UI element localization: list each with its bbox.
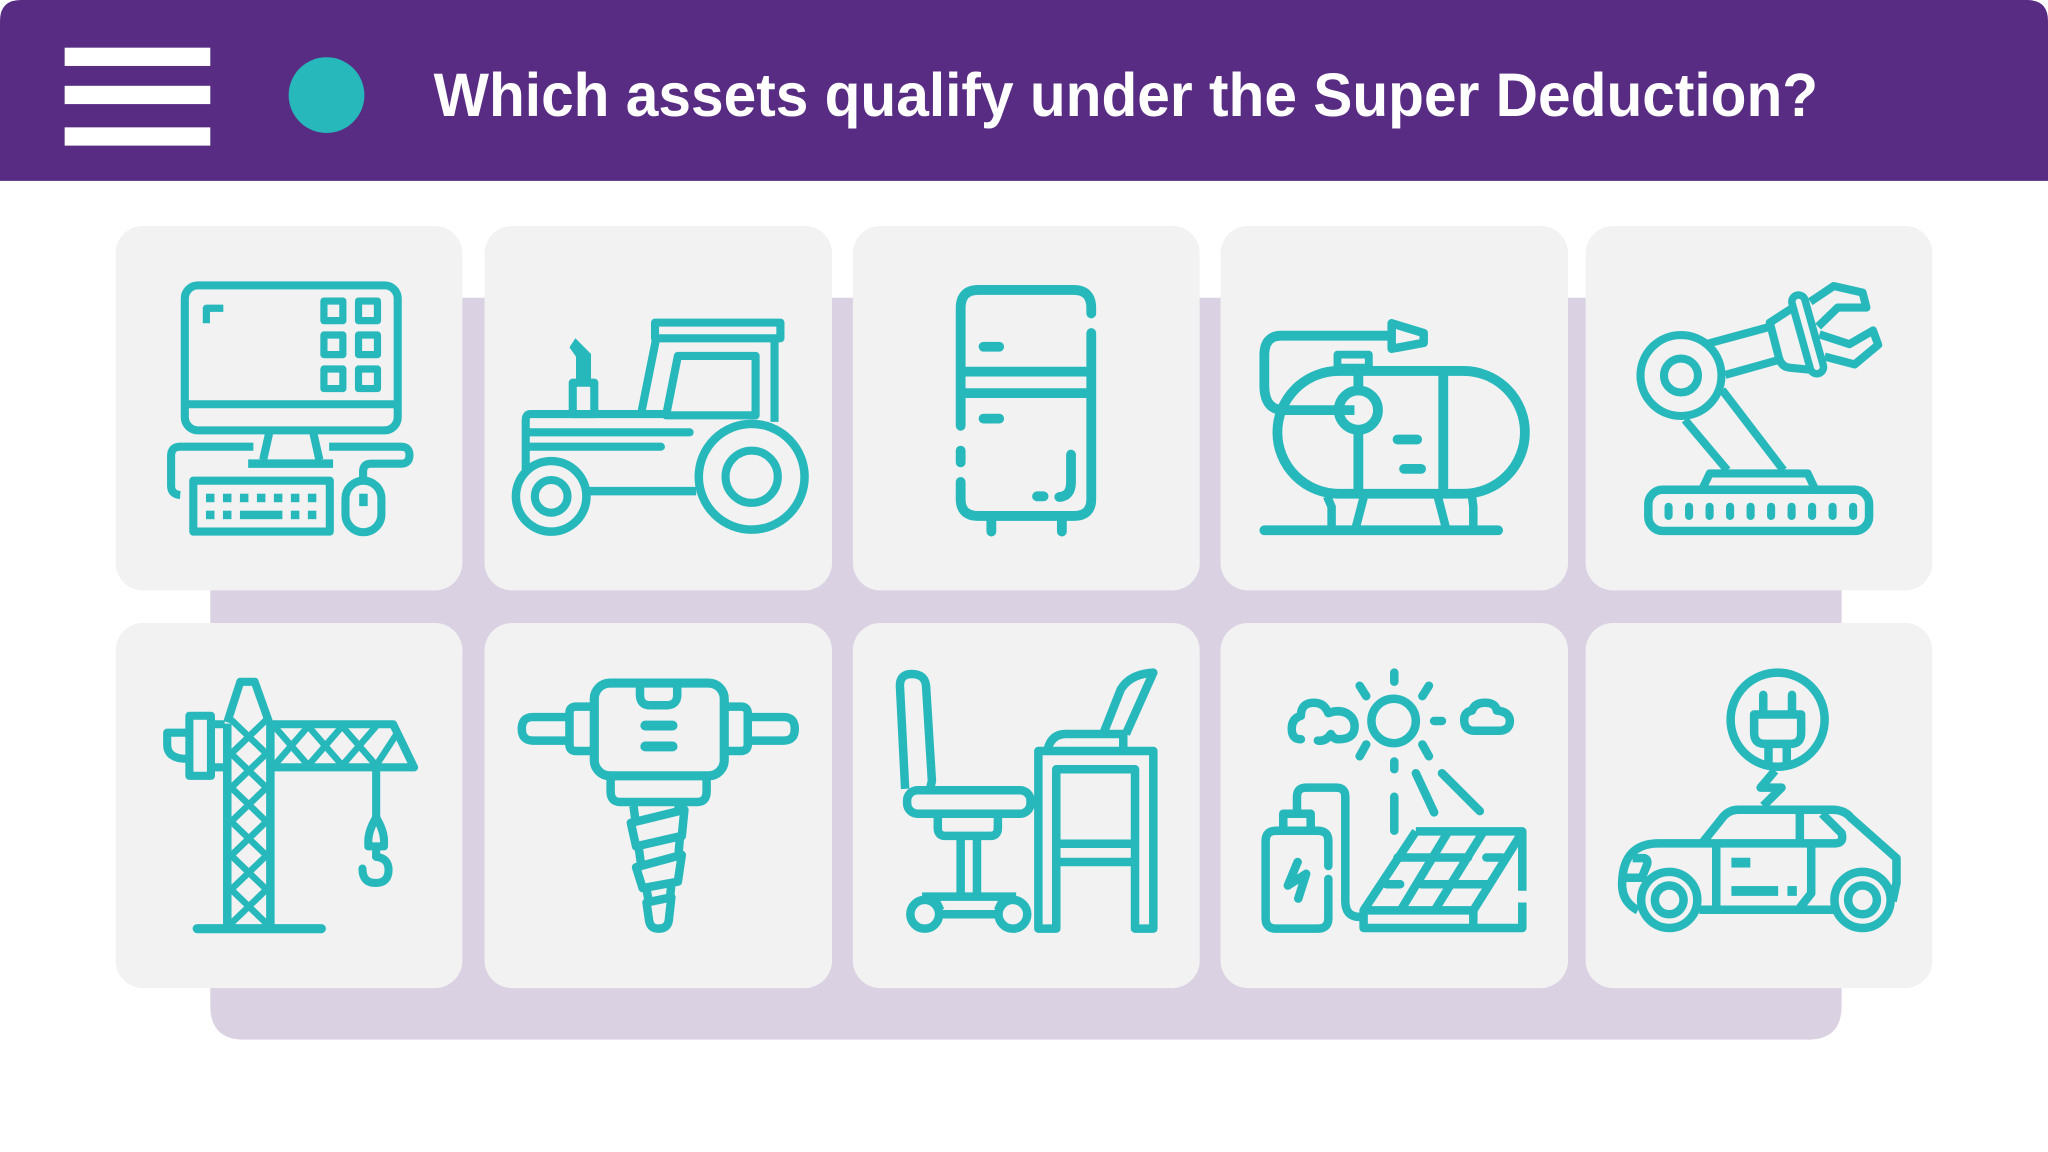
icon: fridge [961,290,1091,532]
icon: tractor [516,323,805,532]
icon: robot arm [1640,286,1878,531]
panel: lilac backing [210,298,1842,1040]
panel: computer [116,226,462,590]
icon: menu bars [65,48,210,146]
icon: air compressor [1264,323,1525,530]
panel: fridge [853,226,1200,590]
icon: teal dot [289,57,364,133]
panel: office furniture [853,623,1200,988]
panel: air compressor [1221,226,1568,590]
icon: chair and desk [900,673,1153,929]
panel: robot arm [1586,226,1932,590]
header banner [0,0,2048,181]
title: Which assets qualify under the Super Deduction? [434,61,1818,130]
panel: solar power [1221,623,1568,988]
icon: tower crane [167,682,414,929]
icon: jackhammer [522,683,795,929]
icon: electric car [1622,673,1896,928]
panel: tower crane [116,623,462,988]
panel: jackhammer [485,623,832,988]
icon: solar panel and battery [1266,673,1522,929]
panel: electric car [1586,623,1932,988]
panel: tractor [485,226,832,590]
icon: desktop computer [171,285,409,532]
